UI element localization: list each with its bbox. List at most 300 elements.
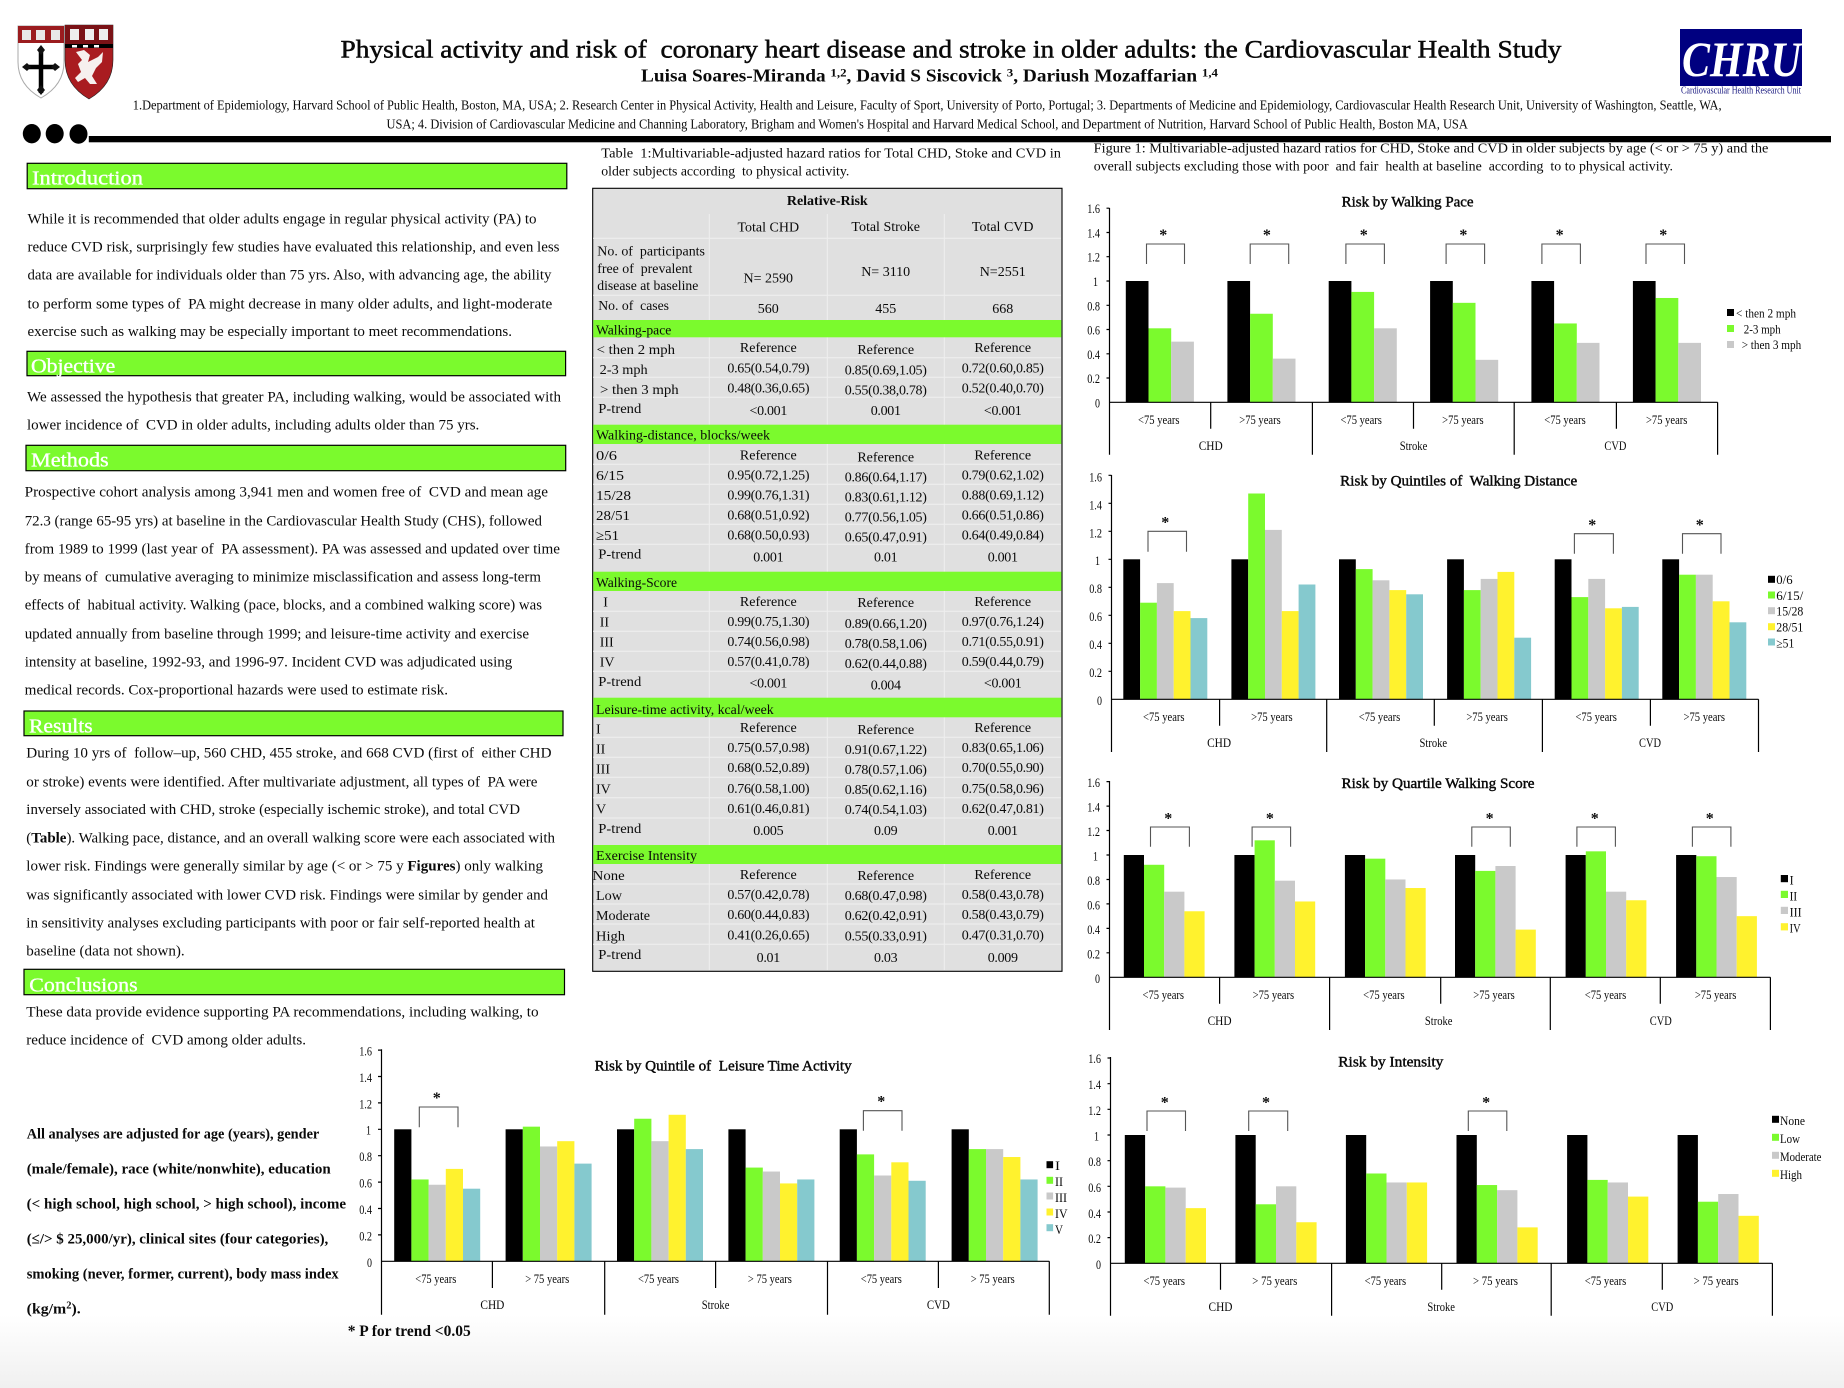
table section: walking distance: 0.86(0.64,1.17) xyxy=(845,470,927,485)
legend: III xyxy=(1790,905,1802,919)
text block: conclusions: reduce incidence of CVD among older adults. xyxy=(26,1032,306,1048)
table section: walking score: II xyxy=(600,616,609,631)
x axis labels: <75 years xyxy=(1585,988,1626,1002)
heading: results: Results xyxy=(29,715,93,737)
table section: exercise intensity: High xyxy=(596,930,625,945)
significance brackets: * xyxy=(1591,810,1599,828)
table section: leisure-time activity: 0.78(0.57,1.06) xyxy=(845,763,927,778)
significance brackets: * xyxy=(1263,227,1271,244)
table section: exercise intensity: None xyxy=(593,869,625,884)
x axis labels xyxy=(1138,413,1688,453)
table section: walking distance xyxy=(593,425,1061,566)
text block: results: in sensitivity analyses excluding participants with poor or fair self-reported health at xyxy=(26,915,536,931)
text block: introduction: data are available for individuals older than 75 yrs. Also, with advancing age, the ability xyxy=(28,267,552,283)
table section: walking distance: 0.88(0.69,1.12) xyxy=(962,488,1044,503)
text block: methods: medical records. Cox-proportional hazards were used to estimate risk. xyxy=(25,682,448,698)
chart: risk by quintiles of walking distance xyxy=(1089,469,1804,752)
table section: exercise intensity: 0.68(0.47,0.98) xyxy=(845,889,927,904)
table section: walking score: Walking-Score xyxy=(596,576,677,591)
table section: walking distance: 28/51 xyxy=(596,509,630,524)
table section: exercise intensity: 0.41(0.26,0.65) xyxy=(727,928,810,943)
x axis labels: > 75 years xyxy=(1694,1274,1739,1288)
authors: 3 xyxy=(1007,66,1013,80)
table section: header rows: N=2551 xyxy=(980,265,1026,280)
panel: results xyxy=(24,711,563,959)
table section: leisure-time activity xyxy=(593,698,1061,839)
heading: conclusions xyxy=(24,969,564,997)
x axis labels: > 75 years xyxy=(1473,1274,1518,1288)
table section: walking score: Reference xyxy=(857,596,914,611)
legend: III xyxy=(1055,1191,1067,1205)
table section: walking distance: 0.68(0.50,0.93) xyxy=(727,528,810,543)
table section: walking distance: Reference xyxy=(974,448,1031,463)
table section: walking pace: 0.55(0.38,0.78) xyxy=(845,383,927,398)
table section: leisure-time activity: 0.001 xyxy=(988,824,1018,839)
table section: leisure-time activity: 0.83(0.65,1.06) xyxy=(962,741,1044,756)
table section: leisure-time activity: 0.09 xyxy=(874,824,898,839)
table section: walking pace: Reference xyxy=(740,341,797,356)
chart title: Risk by Quartile Walking Score xyxy=(1342,776,1535,792)
heading: objective: Objective xyxy=(31,356,115,378)
table section: walking score: Reference xyxy=(974,595,1031,610)
y axis labels: 0.2 xyxy=(1087,946,1100,962)
significance brackets: * xyxy=(1360,227,1368,244)
table section: walking score: 0.62(0.44,0.88) xyxy=(845,657,927,672)
text block: methods: by means of cumulative averaging to minimize misclassification and assess long-term xyxy=(25,569,541,585)
text block: introduction: exercise such as walking may be especially important to meet recommendations. xyxy=(28,324,512,340)
table section: walking distance: 0.95(0.72,1.25) xyxy=(727,468,810,483)
table section: walking pace: Reference xyxy=(974,341,1031,356)
table section: leisure-time activity: I xyxy=(596,723,601,738)
table section: leisure-time activity: 0.70(0.55,0.90) xyxy=(962,761,1044,776)
text block: results xyxy=(26,745,555,959)
x axis labels: CHD xyxy=(480,1297,504,1312)
table section: walking pace: Walking-pace xyxy=(596,324,671,339)
table section: walking score: 0.59(0.44,0.79) xyxy=(962,655,1044,670)
table section: header rows: 560 xyxy=(758,302,779,317)
header: logos, title, authors, affiliations xyxy=(18,25,1831,144)
text block: methods xyxy=(25,485,560,698)
y axis labels: 1.2 xyxy=(1087,250,1100,265)
table section: exercise intensity: 0.009 xyxy=(988,951,1018,966)
heading: introduction: Introduction xyxy=(32,168,143,190)
legend: Low xyxy=(1780,1132,1800,1146)
y axis labels: 1.2 xyxy=(1087,824,1100,839)
y axis labels: 1 xyxy=(1093,274,1098,289)
legend: IV xyxy=(1055,1207,1068,1221)
panel: table 1 relative risk xyxy=(593,188,1062,971)
legend: II xyxy=(1055,1175,1063,1189)
text block: methods: updated annually from baseline through 1999; and leisure-time activity and exercise xyxy=(25,626,529,642)
table section: leisure-time activity: III xyxy=(596,763,610,778)
authors: , Dariush Mozaffarian xyxy=(1013,66,1202,86)
text block: introduction xyxy=(28,211,560,340)
y axis labels: 1.4 xyxy=(1087,226,1100,240)
table section: leisure-time activity: 0.91(0.67,1.22) xyxy=(845,743,927,758)
table section: walking score: 0.004 xyxy=(871,679,901,694)
legend: V xyxy=(1055,1223,1063,1237)
panel: introduction xyxy=(27,163,567,340)
y axis labels: 0 xyxy=(1096,1257,1101,1272)
table section: walking distance: 0/6 xyxy=(596,449,617,464)
significance brackets xyxy=(1146,227,1684,264)
y axis labels: 1 xyxy=(1095,553,1100,568)
table section: exercise intensity: 0.01 xyxy=(757,951,780,966)
table section: walking score: IV xyxy=(600,656,614,671)
x axis labels: >75 years xyxy=(1646,413,1688,427)
table section: exercise intensity: 0.57(0.42,0.78) xyxy=(727,888,810,903)
axes xyxy=(1108,475,1758,752)
x axis labels: > 75 years xyxy=(1252,1274,1297,1288)
significance brackets: * xyxy=(1266,810,1274,828)
x axis labels xyxy=(1144,1274,1739,1314)
text block: introduction: reduce CVD risk, surprisingly few studies have evaluated this relationship, and even less xyxy=(28,240,560,256)
significance brackets: * xyxy=(1482,1094,1490,1112)
table section: walking score: Reference xyxy=(740,595,797,610)
significance brackets: * xyxy=(1486,810,1494,828)
heading: results xyxy=(24,711,563,737)
table section: walking pace: <0.001 xyxy=(749,404,787,419)
x axis labels: <75 years xyxy=(1575,710,1617,724)
legend xyxy=(1727,307,1802,352)
x axis labels: <75 years xyxy=(1143,988,1184,1002)
y axis labels: 1.4 xyxy=(359,1070,372,1085)
table section: leisure-time activity: 0.75(0.57,0.98) xyxy=(727,741,810,756)
text block: objective xyxy=(27,390,561,433)
authors: Luisa Soares-Miranda xyxy=(641,66,813,86)
text block: objective: lower incidence of CVD in older adults, including adults older than 75 yrs. xyxy=(27,417,479,433)
axes xyxy=(1106,208,1718,455)
significance brackets: * xyxy=(1696,517,1704,534)
table section: exercise intensity: 0.58(0.43,0.79) xyxy=(962,908,1044,923)
significance brackets: * xyxy=(1588,517,1596,534)
table section: walking distance: 15/28 xyxy=(596,489,631,504)
icon: CHRU logo: Cardiovascular Health Research Unit xyxy=(1681,86,1801,97)
y axis labels: 1.6 xyxy=(1089,469,1102,484)
table section: walking score: <0.001 xyxy=(984,677,1022,692)
text block: conclusions xyxy=(26,1004,539,1048)
text block: results: or stroke) events were identified. After multivariate adjustment, all types of PA were xyxy=(26,774,538,790)
bars xyxy=(1125,1135,1759,1263)
table section: exercise intensity: Moderate xyxy=(596,909,650,924)
table section: exercise intensity: 0.58(0.43,0.78) xyxy=(962,888,1044,903)
legend: 2-3 mph xyxy=(1744,322,1781,336)
table section: walking distance: Reference xyxy=(740,448,797,463)
significance brackets: * xyxy=(1556,227,1564,244)
x axis labels: > 75 years xyxy=(971,1272,1015,1286)
table section: walking score: <0.001 xyxy=(749,677,787,692)
x axis labels: <75 years xyxy=(1365,1274,1406,1288)
legend: IV xyxy=(1790,922,1801,936)
x axis labels: CHD xyxy=(1199,438,1223,453)
authors: 1,2 xyxy=(830,66,847,80)
table section: exercise intensity xyxy=(593,845,1061,966)
significance brackets: * xyxy=(1161,514,1169,532)
text block: adjustment note xyxy=(27,1126,346,1317)
affiliations xyxy=(133,97,1722,131)
y axis labels: 0.6 xyxy=(1088,1180,1101,1195)
significance brackets xyxy=(1147,1094,1507,1131)
table section: walking score xyxy=(593,572,1061,694)
legend xyxy=(1046,1159,1068,1237)
legend: Moderate xyxy=(1780,1150,1822,1164)
table section: walking distance: 0.01 xyxy=(874,551,898,566)
authors: 1,4 xyxy=(1202,66,1218,80)
table section: exercise intensity: Exercise Intensity xyxy=(596,849,697,864)
table section: walking distance: 0.001 xyxy=(753,551,784,566)
x axis labels: <75 years xyxy=(1138,413,1180,427)
y axis labels xyxy=(1087,201,1100,410)
significance brackets xyxy=(419,1090,902,1131)
table section: header rows: Total CHD xyxy=(737,221,799,236)
x axis labels: >75 years xyxy=(1473,988,1515,1002)
icon: white shield logo xyxy=(18,26,64,98)
bars xyxy=(1126,281,1701,402)
x axis labels xyxy=(415,1272,1015,1312)
text block: objective: We assessed the hypothesis that greater PA, including walking, would be associated with xyxy=(27,390,561,406)
y axis labels: 0.6 xyxy=(1089,609,1102,624)
table section: walking distance: 0.65(0.47,0.91) xyxy=(845,530,927,545)
y axis labels: 1.6 xyxy=(1088,1051,1101,1066)
table section: walking pace: 0.85(0.69,1.05) xyxy=(845,363,927,378)
y axis labels: 0.8 xyxy=(1087,873,1100,888)
table section: exercise intensity: 0.55(0.33,0.91) xyxy=(845,930,927,945)
x axis labels: >75 years xyxy=(1466,710,1508,724)
legend: I xyxy=(1055,1159,1060,1173)
table section: walking distance: 0.68(0.51,0.92) xyxy=(727,508,810,523)
text block: methods: Prospective cohort analysis among 3,941 men and women free of CVD and mean age xyxy=(25,485,548,501)
text block: adjustment note: (kg/m xyxy=(27,1301,64,1317)
panel: methods xyxy=(25,445,566,698)
x axis labels: <75 years xyxy=(1585,1274,1626,1288)
text block: results: was significantly associated with lower CVD risk. Findings were similar by gender and xyxy=(26,887,548,903)
table section: walking distance: 0.79(0.62,1.02) xyxy=(962,468,1044,483)
x axis labels: Stroke xyxy=(1420,735,1447,750)
table section: exercise intensity: Reference xyxy=(857,869,914,884)
legend: ≥51 xyxy=(1776,636,1794,650)
y axis labels: 1.6 xyxy=(1087,201,1100,216)
table section: exercise intensity: Reference xyxy=(974,868,1031,883)
x axis labels: Stroke xyxy=(702,1297,730,1312)
table section: walking pace: 2-3 mph xyxy=(600,363,648,378)
legend: 28/51 xyxy=(1776,620,1803,634)
text block: adjustment note: All analyses are adjusted for age (years), gender xyxy=(27,1126,320,1142)
legend: < then 2 mph xyxy=(1736,307,1797,321)
chart: risk by intensity xyxy=(1088,1051,1822,1316)
table section: walking distance: 6/15 xyxy=(596,469,624,484)
significance brackets: * xyxy=(1659,227,1667,244)
table section: header rows: N= 3110 xyxy=(861,265,910,280)
table section: leisure-time activity: 0.68(0.52,0.89) xyxy=(727,761,810,776)
table section: exercise intensity: P-trend xyxy=(598,948,641,963)
table section: exercise intensity: 0.47(0.31,0.70) xyxy=(962,928,1044,943)
affiliations: 1.Department of Epidemiology, Harvard School of Public Health, Boston, MA, USA; 2. Research Center in Physical Activity, Health and Leisure, Faculty of Sport, University of Porto, Portugal; 3. Departments of Medicine and Epidemiology, Cardiovascular Health Research Unit, University of Washington, Seattle, WA, xyxy=(133,97,1722,112)
table section: walking pace: 0.001 xyxy=(871,404,901,419)
significance brackets: * xyxy=(1459,227,1467,244)
y axis labels: 0.2 xyxy=(1087,371,1100,386)
x axis labels: >75 years xyxy=(1239,413,1281,427)
x axis labels: Stroke xyxy=(1425,1013,1453,1028)
x axis labels: CVD xyxy=(927,1297,950,1312)
y axis labels xyxy=(1089,469,1102,708)
table caption xyxy=(601,146,1061,179)
text block: adjustment note: smoking (never, former, current), body mass index xyxy=(27,1266,339,1282)
text block: adjustment note: (≤/> $ 25,000/yr), clinical sites (four categories), xyxy=(27,1231,329,1247)
bars xyxy=(1124,840,1757,977)
table section: header rows xyxy=(597,194,1034,317)
table section: leisure-time activity: 0.62(0.47,0.81) xyxy=(962,802,1044,817)
table section: walking pace: 0.52(0.40,0.70) xyxy=(962,381,1044,396)
y axis labels: 1.2 xyxy=(359,1096,372,1112)
table section: walking score: I xyxy=(603,596,608,611)
y axis labels: 1.2 xyxy=(1089,525,1102,540)
y axis labels: 0.2 xyxy=(1089,665,1102,680)
table section: leisure-time activity: Reference xyxy=(740,721,797,736)
table section: walking pace: 0.48(0.36,0.65) xyxy=(727,381,810,396)
x axis labels: <75 years xyxy=(415,1272,456,1286)
panel: objective xyxy=(27,351,566,433)
table section: walking score: 0.97(0.76,1.24) xyxy=(962,615,1044,630)
table section: walking distance: 0.64(0.49,0.84) xyxy=(962,528,1044,543)
y axis labels: 1.4 xyxy=(1088,1077,1101,1092)
table section: walking pace: 0.72(0.60,0.85) xyxy=(962,361,1044,376)
y axis labels: 0.2 xyxy=(1088,1231,1101,1246)
table section: leisure-time activity: Reference xyxy=(974,721,1031,736)
table section: leisure-time activity: II xyxy=(596,743,606,758)
chart title: Risk by Quintile of Leisure Time Activity xyxy=(595,1058,852,1074)
y axis labels: 0.8 xyxy=(1088,1154,1101,1169)
table section: leisure-time activity: 0.75(0.58,0.96) xyxy=(962,782,1044,797)
y axis labels: 0 xyxy=(367,1255,372,1270)
table section: walking score: P-trend xyxy=(598,675,641,690)
table section: walking distance: ≥51 xyxy=(596,529,619,544)
x axis labels: > 75 years xyxy=(525,1272,569,1286)
heading: conclusions: Conclusions xyxy=(29,975,138,997)
x axis labels: CVD xyxy=(1650,1013,1672,1028)
table section: leisure-time activity: V xyxy=(596,803,606,818)
y axis labels: 0 xyxy=(1095,971,1100,986)
x axis labels xyxy=(1143,988,1736,1028)
x axis labels: CHD xyxy=(1208,1013,1232,1028)
table section: leisure-time activity: 0.74(0.54,1.03) xyxy=(845,803,927,818)
significance brackets: * xyxy=(877,1094,885,1110)
legend: 0/6 xyxy=(1776,573,1793,587)
y axis labels xyxy=(1088,1051,1101,1272)
text block: adjustment note: ). xyxy=(71,1301,81,1317)
text block: results: lower risk. Findings were generally similar by age (< or > 75 y Figures) only walking xyxy=(26,858,543,874)
text block: adjustment note: 2 xyxy=(66,1300,71,1311)
x axis labels: CVD xyxy=(1604,438,1626,453)
table section: header rows: free of prevalent xyxy=(597,262,692,277)
x axis labels xyxy=(1143,710,1725,750)
table section: leisure-time activity: 0.85(0.62,1.16) xyxy=(845,783,927,798)
heading: objective xyxy=(27,351,566,378)
table section: walking distance: 0.83(0.61,1.12) xyxy=(845,490,927,505)
legend xyxy=(1768,573,1804,650)
table section: walking pace: > then 3 mph xyxy=(600,383,679,398)
x axis labels: CVD xyxy=(1639,735,1661,750)
table section: walking distance: 0.001 xyxy=(988,551,1018,566)
text block: adjustment note: (male/female), race (white/nonwhite), education xyxy=(27,1161,331,1177)
x axis labels: Stroke xyxy=(1400,438,1427,453)
table section: exercise intensity: 0.03 xyxy=(874,951,898,966)
text block: adjustment note: (< high school, high school, > high school), income xyxy=(27,1196,346,1212)
x axis labels: >75 years xyxy=(1442,413,1484,427)
table section: header rows: N= 2590 xyxy=(744,272,793,287)
y axis labels xyxy=(1087,775,1100,986)
y axis labels: 0.6 xyxy=(1087,898,1100,912)
table section: walking score: 0.57(0.41,0.78) xyxy=(727,655,810,670)
chart: risk by quintile of leisure time activity xyxy=(359,1044,1068,1315)
x axis labels: > 75 years xyxy=(748,1272,792,1286)
significance brackets: * xyxy=(1706,810,1714,828)
y axis labels: 0.4 xyxy=(359,1202,372,1217)
text block: methods: 72.3 (range 65-95 yrs) at baseline in the Cardiovascular Health Study (CHS), followed xyxy=(25,513,542,529)
y axis labels: 1.4 xyxy=(1089,497,1102,512)
table caption: Table 1:Multivariable-adjusted hazard ratios for Total CHD, Stoke and CVD in xyxy=(601,146,1061,161)
x axis labels: >75 years xyxy=(1253,988,1294,1002)
x axis labels: <75 years xyxy=(638,1272,679,1286)
table section: header rows: Relative-Risk xyxy=(787,194,868,209)
text block: methods: effects of habitual activity. Walking (pace, blocks, and a combined walking score) was xyxy=(25,597,542,613)
table section: leisure-time activity: Leisure-time activity, kcal/week xyxy=(596,703,774,718)
y axis labels: 0.6 xyxy=(1087,322,1100,338)
table section: header rows: Total CVD xyxy=(972,220,1034,235)
significance brackets: * xyxy=(1159,227,1167,244)
figure caption: overall subjects excluding those with poor and fair health at baseline according to to physical activity. xyxy=(1094,160,1673,175)
y axis labels: 1 xyxy=(1094,1128,1099,1144)
y axis labels xyxy=(359,1044,372,1270)
x axis labels: <75 years xyxy=(1340,413,1382,427)
table section: header rows: No. of participants xyxy=(597,244,705,259)
text block: methods: intensity at baseline, 1992-93, and 1996-97. Incident CVD was adjudicated using xyxy=(25,654,513,670)
y axis labels: 1.4 xyxy=(1087,800,1100,814)
table section: exercise intensity: Reference xyxy=(740,868,797,883)
table section: leisure-time activity: Reference xyxy=(857,723,914,738)
axes xyxy=(378,1049,1049,1315)
y axis labels: 0 xyxy=(1097,693,1102,708)
significance brackets: * xyxy=(1161,1094,1169,1112)
y axis labels: 1 xyxy=(366,1122,371,1138)
x axis labels: CHD xyxy=(1207,735,1231,750)
table section: walking distance: 0.77(0.56,1.05) xyxy=(845,510,927,525)
chart title: Risk by Quintiles of Walking Distance xyxy=(1340,474,1578,490)
table section: leisure-time activity: 0.76(0.58,1.00) xyxy=(727,782,810,797)
x axis labels: >75 years xyxy=(1251,710,1293,724)
text block: introduction: While it is recommended that older adults engage in regular physical activity (PA) to xyxy=(28,211,536,227)
table section: walking distance: Walking-distance, blocks/week xyxy=(596,429,770,444)
icon: CHRU logo: CHRU xyxy=(1682,31,1803,87)
table section: exercise intensity: 0.60(0.44,0.83) xyxy=(727,908,810,923)
legend: > then 3 mph xyxy=(1742,338,1802,352)
chart: risk by quartile walking score xyxy=(1087,775,1802,1030)
table section: walking pace: P-trend xyxy=(598,402,641,417)
significance brackets xyxy=(1150,810,1731,847)
x axis labels: CHD xyxy=(1208,1299,1232,1314)
significance brackets: * xyxy=(1164,810,1172,828)
table section: walking pace: Reference xyxy=(857,343,914,358)
text block: introduction: to perform some types of PA might decrease in many older adults, and light-moderate xyxy=(28,296,553,312)
y axis labels: 0.4 xyxy=(1087,347,1100,362)
title: Physical activity and risk of coronary heart disease and stroke in older adults: the Cardiovascular Health Study xyxy=(340,36,1562,63)
x axis labels: Stroke xyxy=(1427,1299,1455,1314)
panel: conclusions xyxy=(24,969,564,1048)
x axis labels: >75 years xyxy=(1684,710,1725,724)
y axis labels: 1.6 xyxy=(1087,775,1100,790)
legend: II xyxy=(1790,889,1797,903)
y axis labels: 0.4 xyxy=(1088,1206,1101,1221)
text block: results: baseline (data not shown). xyxy=(26,943,185,959)
